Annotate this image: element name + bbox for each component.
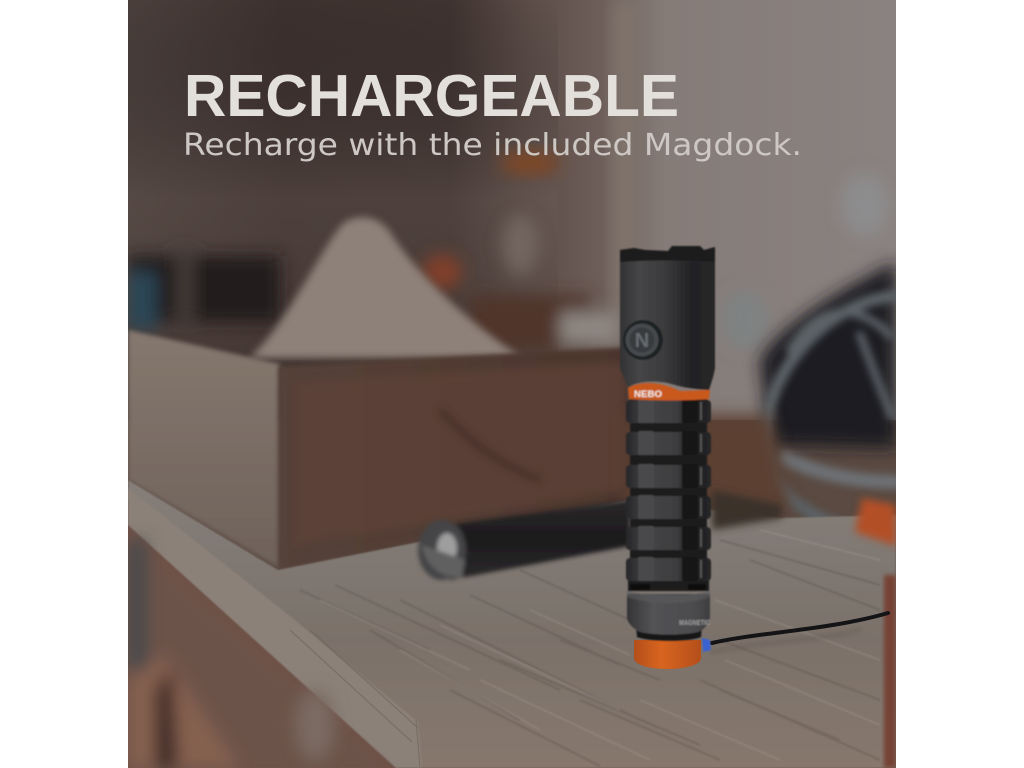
photo background	[128, 0, 896, 768]
table edge plies	[290, 630, 420, 768]
orange neck band	[628, 383, 710, 400]
grip ring 6	[626, 557, 711, 581]
table front edge	[128, 488, 422, 768]
blurred shelf underside	[128, 540, 385, 768]
flashlight grip core	[630, 398, 707, 584]
grip ring 1	[626, 399, 711, 423]
blurred orange object	[500, 151, 560, 175]
wooden box: knot shadow	[440, 410, 540, 480]
wooden box: panel shading	[295, 362, 625, 545]
wood grain	[300, 530, 880, 766]
blurred shelf shadows	[128, 540, 335, 768]
table top	[128, 480, 896, 768]
product photo infographic	[128, 0, 896, 768]
wooden box: dark frame	[286, 372, 288, 556]
flashlight	[620, 246, 715, 641]
blurred background clutter	[128, 173, 889, 350]
wooden box: front face	[278, 347, 630, 570]
blurred cement mound	[250, 217, 522, 358]
grip ring 4	[626, 495, 711, 519]
blurred flashlight lying down	[418, 490, 782, 580]
subtitle: Recharge with the included Magdock.	[183, 128, 802, 163]
blue magnetic charging tip	[702, 638, 711, 652]
flashlight head	[620, 246, 715, 390]
right foreground blur strip	[884, 575, 896, 768]
grip ring 2	[626, 431, 711, 455]
shelf underside	[128, 500, 400, 768]
power button	[623, 320, 663, 360]
grip ring 3	[626, 464, 711, 488]
button N mark: N	[635, 330, 649, 352]
title: RECHARGEABLE	[184, 63, 679, 129]
blurred orange tool	[855, 498, 896, 546]
wooden box: left side	[128, 330, 280, 568]
head bezel	[620, 246, 715, 262]
blurred cable bundle	[760, 262, 896, 530]
magnetic engraving: MAGNETIC	[679, 618, 710, 627]
orange magdock base	[634, 640, 701, 669]
charging cable	[710, 611, 890, 645]
NEBO logo: NEBO	[634, 389, 662, 399]
grip ring 5	[626, 526, 711, 550]
back wall	[128, 0, 896, 768]
flashlight tail collar	[627, 580, 710, 641]
blurred background surface right	[625, 415, 790, 520]
